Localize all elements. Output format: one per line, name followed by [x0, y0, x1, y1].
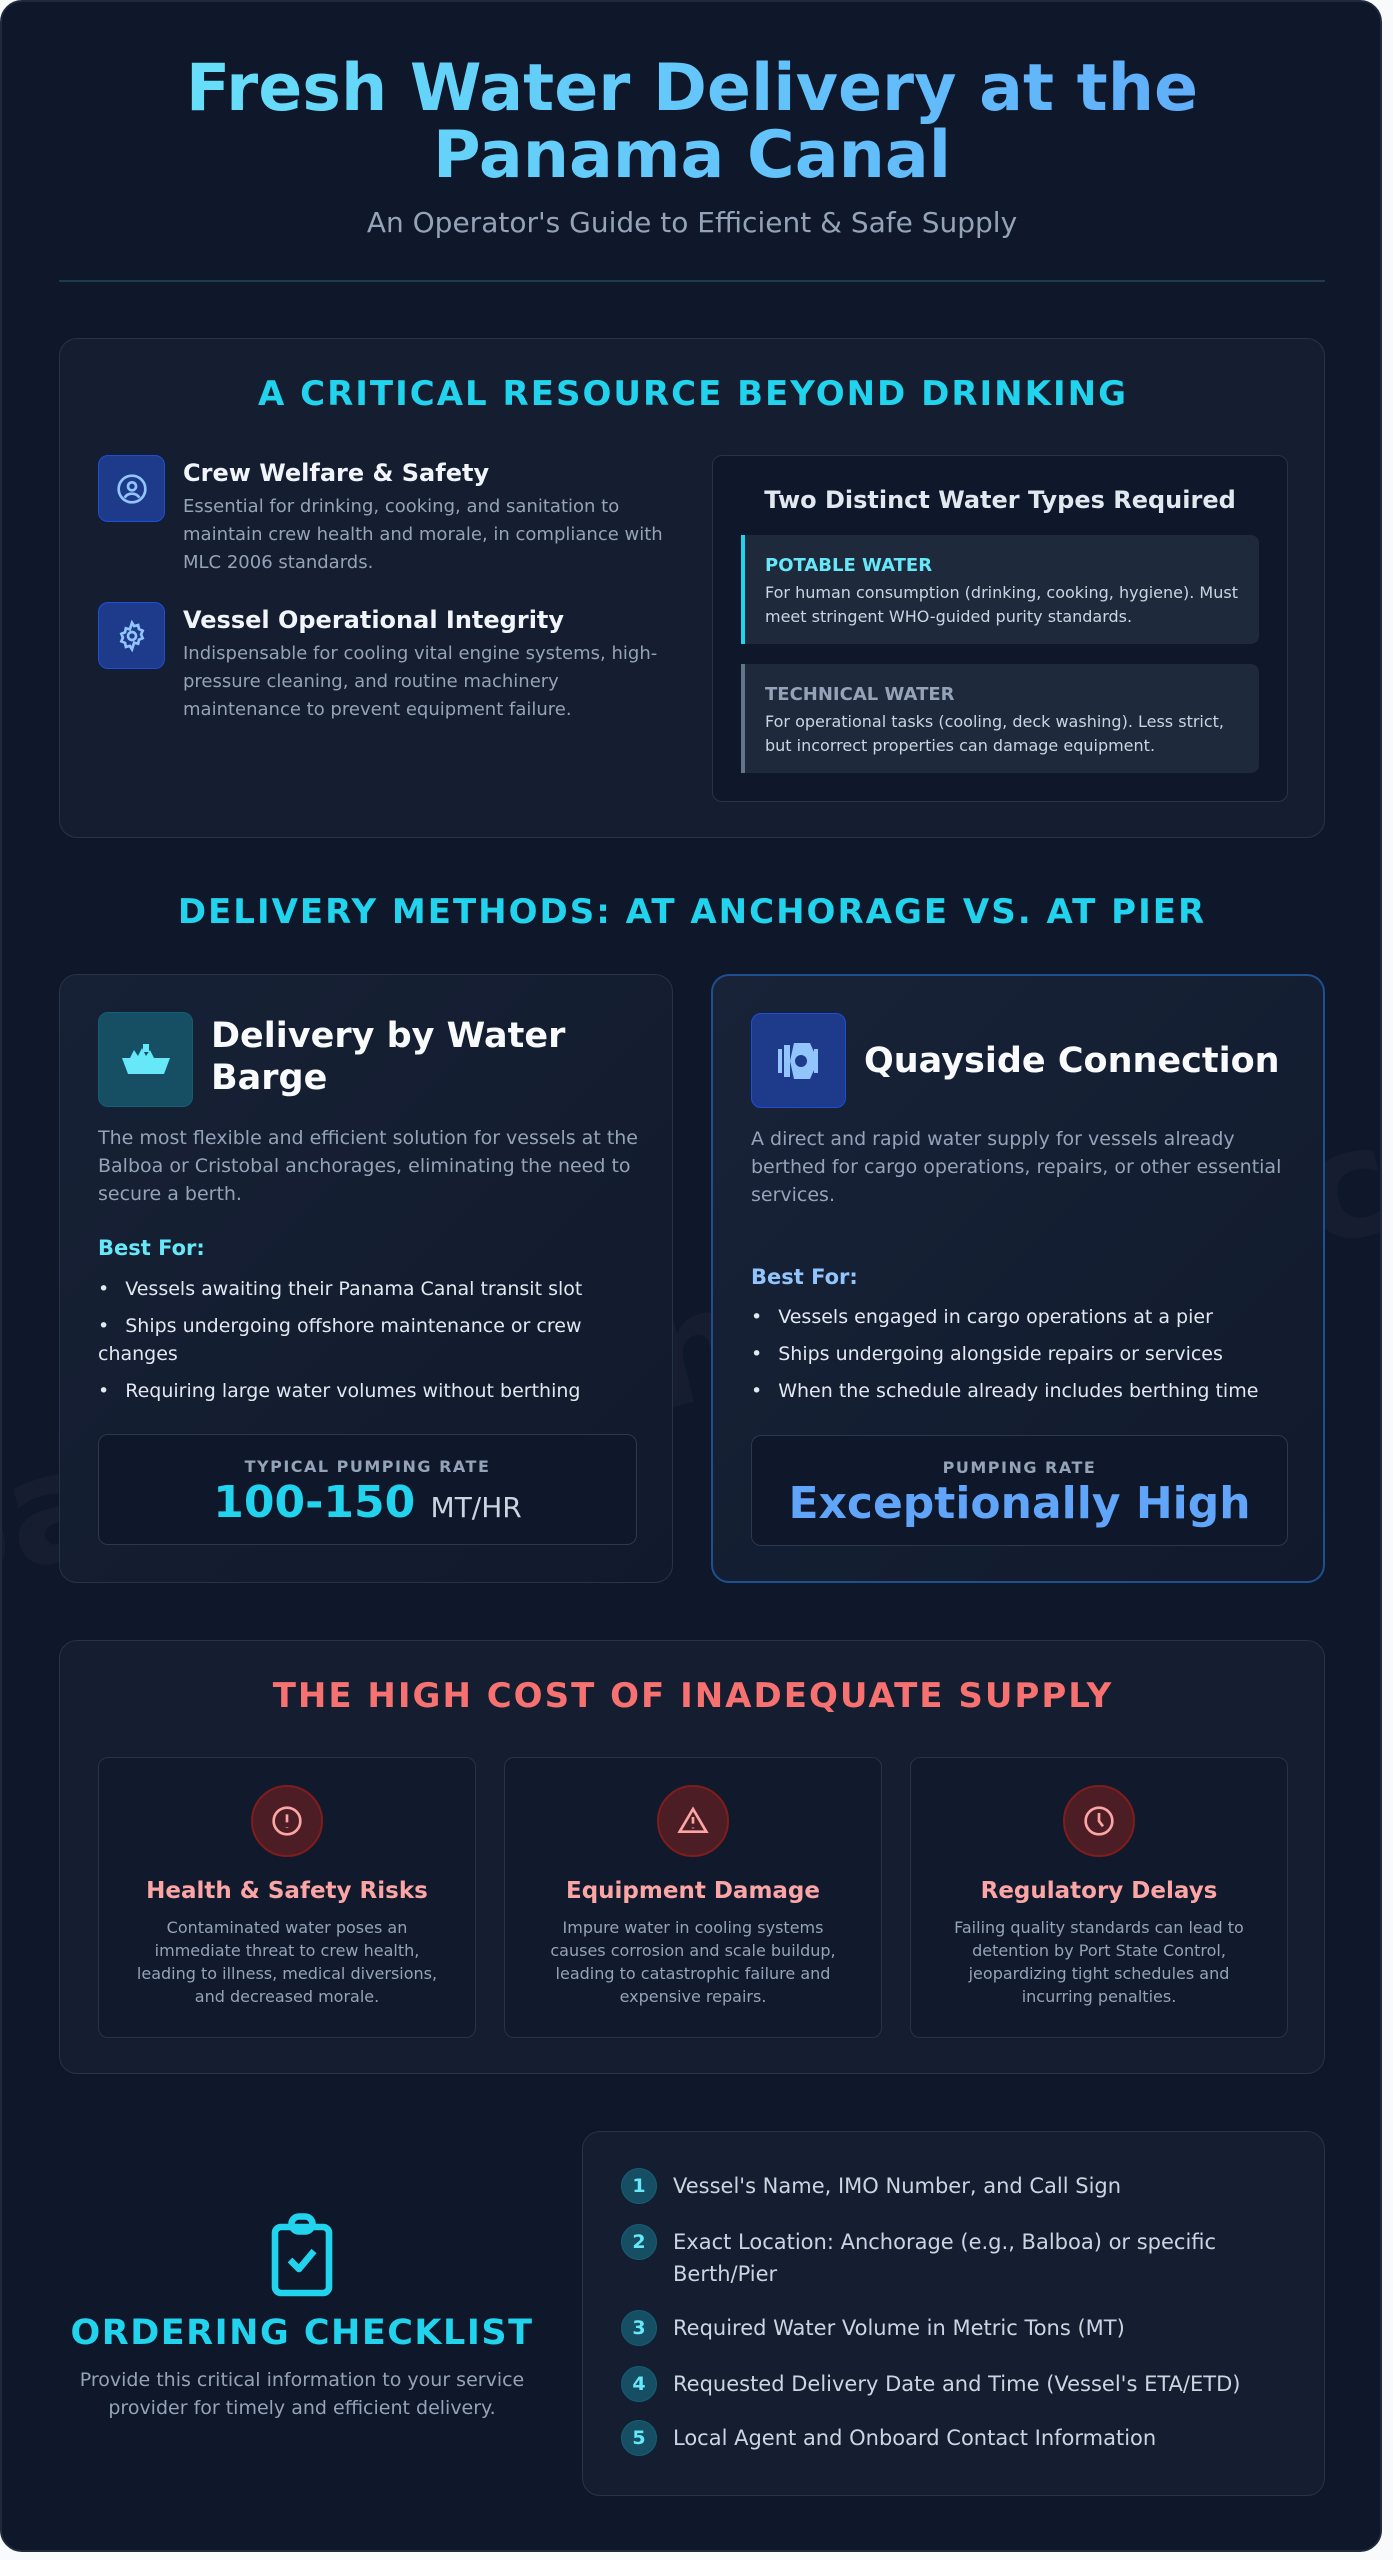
- card: water barge: Requiring large water volumes without berthing: [125, 1380, 580, 1402]
- rate box: [98, 1434, 637, 1545]
- checklist box: Vessel's Name, IMO Number, and Call Sign: [673, 2174, 1121, 2198]
- checklist box: Requested Delivery Date and Time (Vessel's ETA/ETD): [673, 2372, 1240, 2396]
- checklist box: Exact Location: Anchorage (e.g., Balboa) or specific Berth/Pier: [673, 2230, 1216, 2286]
- item: vessel integrity: Indispensable for cooling vital engine systems, high-pressure cleaning, and routine machinery maintenance to prevent equipment failure.: [183, 643, 657, 720]
- item 1: [621, 2168, 657, 2204]
- best for: Best For:: [98, 1236, 205, 1260]
- card: quayside: A direct and rapid water supply for vessels already berthed for cargo operations, repairs, or other essential services.: [751, 1128, 1281, 1206]
- card: quayside: [711, 974, 1325, 1583]
- potable water: [741, 535, 1259, 644]
- title: [211, 1016, 566, 1098]
- card: quayside: When the schedule already includes berthing time: [778, 1380, 1258, 1402]
- rate box: 100-150 MT/HR: [213, 1477, 522, 1528]
- icon: ship: [98, 1012, 193, 1107]
- card: regulatory: Failing quality standards can lead to detention by Port State Control, jeopardizing tight schedules and incurring penalties.: [954, 1918, 1244, 2006]
- card: health: Contaminated water poses an immediate threat to crew health, leading to illness, medical diversions, and decreased morale.: [137, 1918, 437, 2006]
- technical water: TECHNICAL WATER: [765, 684, 955, 705]
- card: regulatory: Regulatory Delays: [981, 1878, 1217, 1904]
- card: health: [98, 1757, 476, 2038]
- card: health: Health & Safety Risks: [146, 1878, 428, 1904]
- item 5: [621, 2420, 657, 2456]
- item 3: 3: [632, 2317, 646, 2339]
- item 2: [621, 2224, 657, 2260]
- heading: ORDERING CHECKLIST: [71, 2313, 533, 2353]
- technical water: For operational tasks (cooling, deck washing). Less strict, but incorrect properties can damage equipment.: [765, 712, 1224, 755]
- card: equipment: Impure water in cooling systems causes corrosion and scale buildup, leading to catastrophic failure and expensive repairs.: [550, 1918, 836, 2006]
- item: vessel integrity: Vessel Operational Integrity: [183, 606, 564, 634]
- rate box: [751, 1435, 1288, 1546]
- title: Barge: [211, 1058, 327, 1098]
- card: equipment: [504, 1757, 882, 2038]
- box: water types: Two Distinct Water Types Required: [764, 486, 1236, 514]
- checklist intro: Provide this critical information to your service: [80, 2369, 524, 2391]
- icon: clock: [1063, 1785, 1135, 1857]
- card: equipment: Equipment Damage: [566, 1878, 820, 1904]
- title: Quayside Connection: [864, 1041, 1280, 1081]
- item: vessel integrity: [98, 602, 657, 720]
- icon: warning: [657, 1785, 729, 1857]
- item: crew welfare: [98, 455, 663, 573]
- card: water barge: [59, 974, 673, 1583]
- icon: plug: [751, 1013, 846, 1108]
- heading: high cost: THE HIGH COST OF INADEQUATE SUPPLY: [273, 1676, 1113, 1716]
- card: water barge: The most flexible and efficient solution for vessels at the Balboa or Cristobal anchorages, eliminating the need to secure a berth.: [98, 1127, 638, 1205]
- card: water barge: Vessels awaiting their Panama Canal transit slot: [125, 1278, 582, 1300]
- item 4: [621, 2366, 657, 2402]
- item 2: 2: [632, 2231, 646, 2253]
- heading: critical resource: A CRITICAL RESOURCE BEYOND DRINKING: [258, 374, 1128, 414]
- heading: delivery methods: DELIVERY METHODS: AT ANCHORAGE VS. AT PIER: [178, 892, 1206, 932]
- item: crew welfare: Crew Welfare & Safety: [183, 459, 489, 487]
- panel: high cost: [59, 1640, 1325, 2074]
- title: Fresh Water Delivery at the: [186, 51, 1198, 126]
- title: [2, 55, 1382, 189]
- icon: person: [98, 455, 165, 522]
- item 5: 5: [632, 2427, 646, 2449]
- checklist box: Local Agent and Onboard Contact Information: [673, 2426, 1156, 2450]
- subtitle: An Operator's Guide to Efficient & Safe Supply: [367, 206, 1017, 239]
- card: regulatory: [910, 1757, 1288, 2038]
- checklist intro: [71, 2213, 533, 2419]
- rate box: Exceptionally High: [788, 1478, 1251, 1529]
- checklist box: Required Water Volume in Metric Tons (MT): [673, 2316, 1125, 2340]
- icon: alert: [251, 1785, 323, 1857]
- potable water: For human consumption (drinking, cooking, hygiene). Must meet stringent WHO-guided purity standards.: [765, 583, 1238, 626]
- box: water types: [712, 455, 1288, 802]
- card: quayside: Ships undergoing alongside repairs or services: [778, 1343, 1223, 1365]
- checklist intro: provider for timely and efficient delivery.: [108, 2397, 496, 2419]
- rate box: PUMPING RATE: [943, 1458, 1096, 1477]
- title: Panama Canal: [433, 118, 951, 193]
- item 1: 1: [632, 2175, 646, 2197]
- title: Delivery by Water: [211, 1016, 565, 1056]
- potable water: POTABLE WATER: [765, 555, 932, 576]
- technical water: [741, 664, 1259, 773]
- icon: clipboard: [272, 2213, 332, 2296]
- card: quayside: Vessels engaged in cargo operations at a pier: [778, 1306, 1213, 1328]
- item: crew welfare: Essential for drinking, cooking, and sanitation to maintain crew health and morale, in compliance with MLC 2006 standards.: [183, 496, 663, 573]
- checklist box: [582, 2131, 1325, 2496]
- item 3: [621, 2310, 657, 2346]
- item 4: 4: [632, 2373, 646, 2395]
- card: water barge: Ships undergoing offshore maintenance or crew changes: [98, 1315, 581, 1365]
- icon: gear: [98, 602, 165, 669]
- rate box: TYPICAL PUMPING RATE: [245, 1457, 490, 1476]
- panel: critical resource: [59, 338, 1325, 838]
- best for: Best For:: [751, 1265, 858, 1289]
